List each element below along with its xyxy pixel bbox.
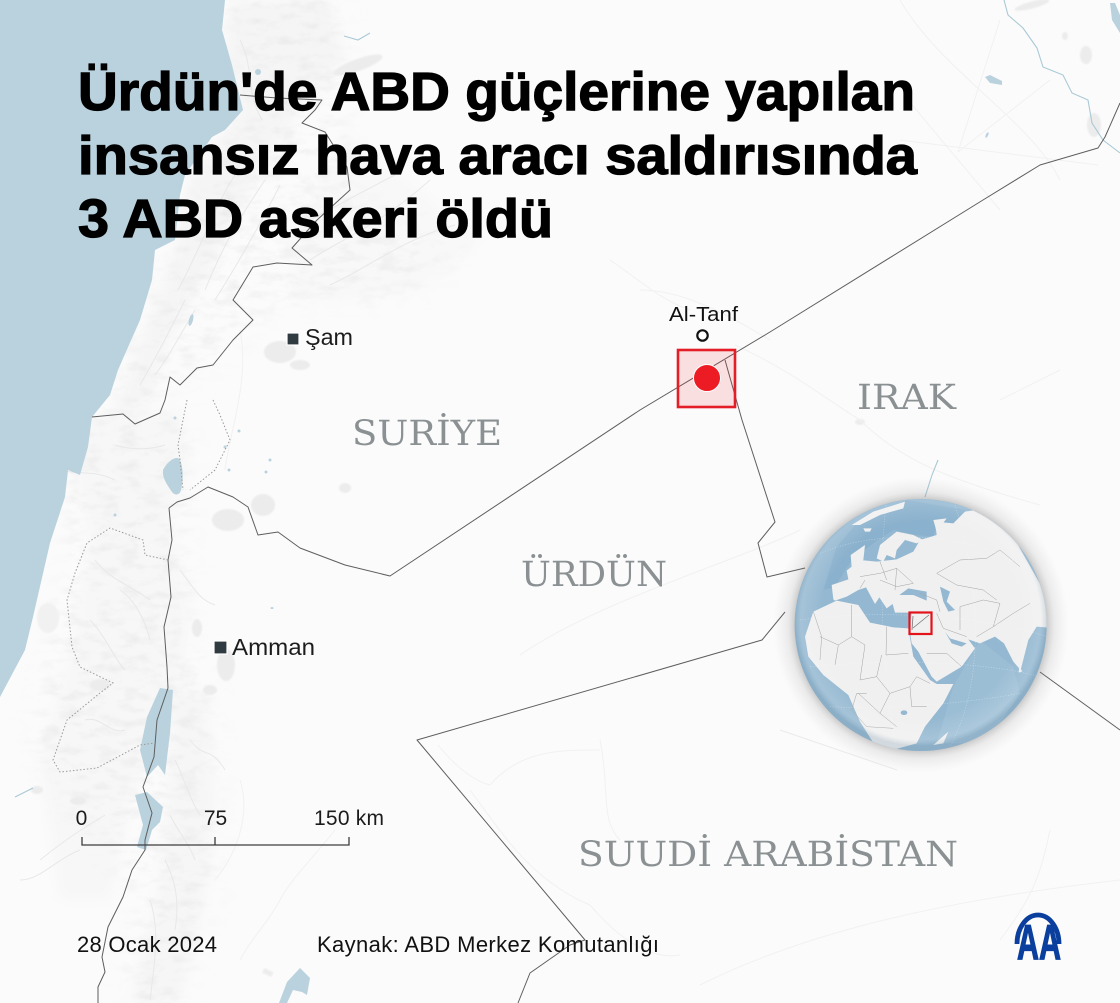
disputed territory dotted borders (53, 400, 230, 772)
country label: Irak: IRAK (857, 378, 957, 418)
country label: Suudi Arabistan: SUUDİ ARABİSTAN (578, 833, 958, 875)
country label: Suriye: SURİYE (352, 412, 502, 454)
scale bar: 0 (76, 807, 87, 830)
scale bar (76, 807, 384, 845)
label: Al-Tanf (669, 304, 738, 341)
date: 28 Ocak 2024 (77, 932, 217, 957)
source: Kaynak: ABD Merkez Komutanlığı (317, 932, 659, 957)
title: 3 ABD askeri öldü (78, 189, 553, 249)
city: Şam: Şam (305, 324, 353, 350)
city: Amman: Amman (232, 634, 315, 660)
label: Al-Tanf: Al-Tanf (669, 304, 738, 326)
logo: Anadolu Agency: AA (1017, 916, 1061, 970)
scale bar: 75 (204, 807, 227, 830)
scale bar: 150 km (314, 807, 384, 830)
locator globe (781, 485, 1061, 765)
marker: Al-Tanf attack location (678, 350, 735, 407)
title (78, 62, 918, 249)
logo: Anadolu Agency (1017, 915, 1061, 970)
country label: Ürdün: ÜRDÜN (521, 553, 667, 595)
title: insansız hava aracı saldırısında (78, 126, 918, 186)
sea: Mediterranean (0, 0, 243, 697)
title: Ürdün'de ABD güçlerine yapılan (78, 62, 915, 122)
